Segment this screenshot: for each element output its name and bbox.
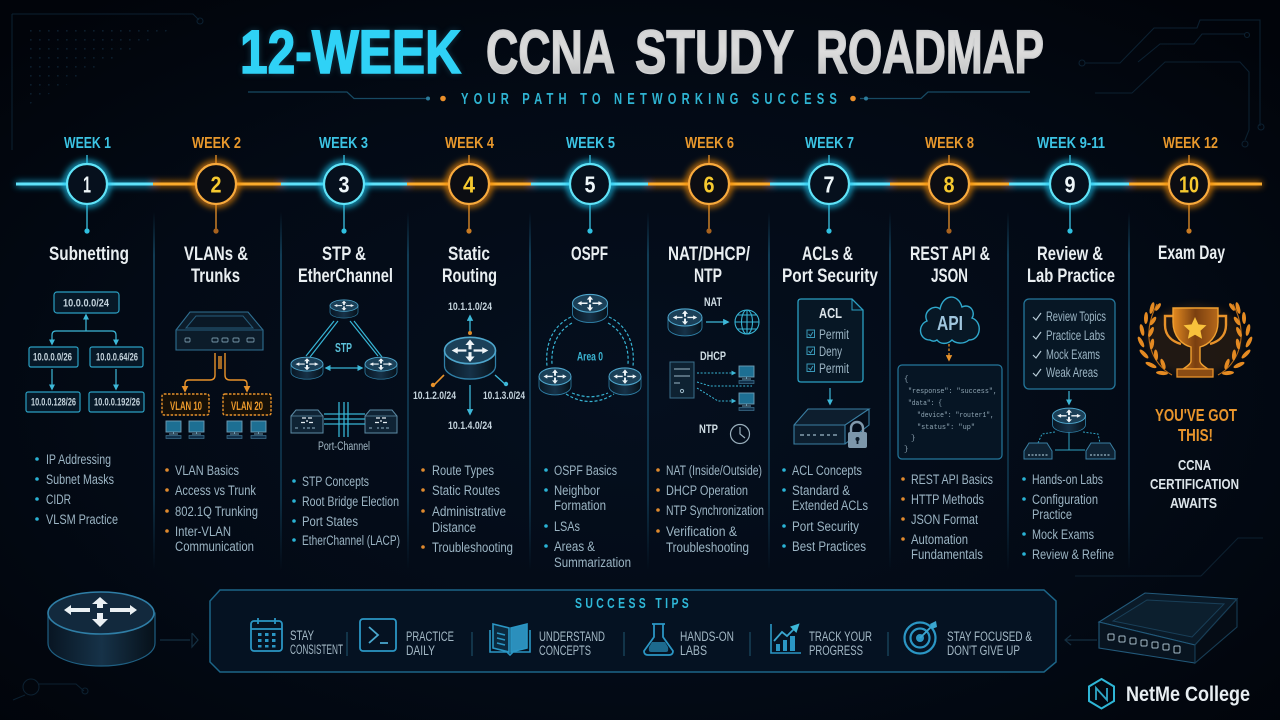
node 3: 3 [338, 172, 350, 198]
topic list: Standard & [792, 483, 850, 498]
DHCP diagram [670, 349, 754, 410]
panel: week 4 [413, 135, 525, 555]
JSON response box: "device": "router1", [917, 412, 994, 420]
week label: WEEK 5 [566, 135, 615, 152]
heading: STP & [322, 243, 366, 265]
topic list: Mock Exams [1032, 527, 1094, 542]
node 5: 5 [584, 172, 596, 198]
OSPF area diagram: Area 0 [577, 350, 603, 364]
panel: week 6 [656, 135, 764, 555]
STP triangle diagram [291, 300, 397, 379]
callout: you've got this [1155, 405, 1237, 445]
topic list: Summarization [554, 555, 631, 570]
heading: NTP [694, 265, 722, 287]
tip: practice daily: PRACTICE [406, 629, 454, 644]
topic list: DHCP Operation [666, 483, 748, 498]
heading: JSON [931, 265, 968, 287]
tip: stay consistent: STAY [290, 628, 314, 643]
tip: track your progress [771, 624, 872, 658]
node 1 [66, 155, 108, 234]
logo: NetMe College: NetMe College [1126, 683, 1250, 706]
subtitle [248, 89, 1030, 107]
NTP label and clock [699, 422, 750, 444]
node 8 [928, 155, 970, 234]
topic list: VLAN Basics [175, 463, 239, 478]
node 7 [808, 155, 850, 234]
DHCP diagram: DHCP [700, 349, 726, 363]
topic list: ACL Concepts [792, 463, 862, 478]
week label: WEEK 8 [925, 135, 974, 152]
week label: WEEK 12 [1163, 135, 1218, 152]
ACL document: Deny [819, 344, 842, 359]
checklist [1024, 299, 1115, 389]
topic list: REST API Basics [911, 472, 993, 487]
heading [668, 243, 750, 287]
topic list: Formation [554, 498, 606, 513]
heading: Lab Practice [1027, 265, 1115, 287]
panel: week 3 [291, 135, 400, 548]
decoration: dot grid [30, 30, 166, 104]
title: STUDY [635, 18, 794, 86]
tip: stay focused: DON'T GIVE UP [947, 643, 1020, 658]
node 8: 8 [944, 172, 955, 198]
subnet tree diagram: 10.0.0.0/26 [33, 352, 72, 364]
VLAN trunk diagram: VLAN 10 [170, 401, 202, 413]
topic list: Root Bridge Election [302, 494, 399, 509]
port-channel diagram: Port-Channel [318, 441, 370, 453]
heading: Exam Day [1158, 242, 1225, 264]
checklist: Practice Labs [1046, 328, 1105, 343]
topic list: Neighbor [554, 483, 600, 498]
topic list [901, 472, 993, 562]
NTP label and clock: NTP [699, 422, 718, 436]
JSON response box: } [911, 435, 916, 443]
topic list: Best Practices [792, 539, 866, 554]
panel: week 2 [162, 135, 271, 554]
topic list [656, 463, 764, 555]
topic list: Practice [1032, 507, 1072, 522]
node 7: 7 [824, 172, 834, 198]
JSON response box: "status": "up" [917, 424, 975, 432]
OSPF area diagram [539, 294, 641, 402]
API cloud [921, 297, 979, 360]
text: CCNA certification awaits [1150, 457, 1239, 512]
arrow: router to tips [160, 633, 198, 647]
heading: VLANs & [184, 243, 248, 265]
heading: SUCCESS TIPS [575, 595, 689, 611]
week label: WEEK 1 [64, 135, 111, 152]
subnet tree diagram: 10.0.0.64/26 [96, 352, 138, 364]
topic list: 802.1Q Trunking [175, 504, 258, 519]
topic list [292, 474, 400, 548]
topic list: Access vs Trunk [175, 483, 256, 498]
icon: large switch [1099, 593, 1237, 663]
tip: stay consistent: CONSISTENT [290, 642, 343, 657]
tip: understand concepts [490, 624, 605, 658]
tip: stay focused: STAY FOCUSED & [947, 629, 1032, 644]
panel: week 8 [898, 135, 1002, 562]
topic list: CIDR [46, 492, 71, 507]
tip: understand concepts: UNDERSTAND [539, 629, 605, 644]
topic list: OSPF Basics [554, 463, 617, 478]
checklist: Weak Areas [1046, 365, 1098, 380]
node 10 [1168, 155, 1210, 234]
topic list: Route Types [432, 463, 494, 478]
tip: track your progress: TRACK YOUR [809, 629, 872, 644]
JSON response box: "response": "success", [908, 388, 997, 396]
topic list: STP Concepts [302, 474, 369, 489]
node 1: 1 [83, 172, 91, 198]
heading: NAT/DHCP/ [668, 243, 750, 265]
heading [910, 243, 990, 287]
text: CCNA certification awaits: CERTIFICATION [1150, 476, 1239, 493]
column dividers [154, 212, 1129, 570]
node 9: 9 [1064, 172, 1076, 198]
heading: Review & [1037, 243, 1103, 265]
heading: OSPF [571, 243, 608, 265]
ACL document: Permit [819, 327, 849, 342]
heading: Static [448, 243, 490, 265]
topic list [421, 463, 513, 555]
subtitle: YOUR PATH TO NETWORKING SUCCESS [461, 89, 837, 107]
topic list: JSON Format [911, 512, 978, 527]
static routing diagram: 10.1.4.0/24 [448, 420, 492, 432]
JSON response box: "data": { [908, 400, 942, 408]
VLAN trunk diagram: VLAN 20 [231, 401, 263, 413]
tip: understand concepts: CONCEPTS [539, 643, 591, 658]
topic list: Communication [175, 539, 254, 554]
JSON response box: } [904, 446, 909, 454]
subnet tree diagram [26, 292, 144, 412]
NAT diagram [668, 295, 759, 336]
port-channel diagram [291, 402, 397, 453]
week label: WEEK 7 [805, 135, 854, 152]
tip: stay focused [904, 621, 1032, 658]
topic list: Configuration [1032, 492, 1098, 507]
topic list: Verification & [666, 524, 737, 539]
topic list: Port Security [792, 519, 859, 534]
node 6: 6 [704, 172, 714, 198]
node 2 [196, 155, 236, 234]
node 4: 4 [463, 172, 475, 198]
NAT diagram: NAT [704, 295, 722, 309]
subnet tree diagram: 10.0.0.128/26 [31, 396, 76, 408]
tip: hands-on labs: HANDS-ON [680, 629, 734, 644]
panel: success tips [210, 590, 1056, 672]
heading: Routing [442, 265, 497, 287]
topic list: Extended ACLs [792, 498, 868, 513]
JSON response box: { [904, 376, 909, 384]
static routing diagram: 10.1.3.0/24 [483, 390, 525, 402]
icon: trophy with laurels [1136, 302, 1254, 377]
ACL document: Permit [819, 361, 849, 376]
tip: practice daily: DAILY [406, 643, 435, 658]
panel: week 1 [26, 135, 144, 527]
week label: WEEK 2 [192, 135, 241, 152]
text: CCNA certification awaits: AWAITS [1170, 495, 1217, 512]
callout: you've got this: THIS! [1178, 425, 1213, 445]
topic list: Inter-VLAN [175, 524, 231, 539]
node 2: 2 [210, 172, 222, 198]
API cloud: API [937, 313, 963, 335]
node 4 [448, 155, 490, 234]
title: 12-WEEK [240, 18, 461, 86]
tip separators [347, 632, 888, 656]
text: CCNA certification awaits: CCNA [1178, 457, 1211, 474]
topic list [35, 452, 118, 527]
heading [442, 243, 497, 287]
topic list: Subnet Masks [46, 472, 114, 487]
topic list: VLSM Practice [46, 512, 118, 527]
heading: Subnetting [49, 243, 129, 265]
node 10: 10 [1179, 172, 1199, 198]
topic list: NTP Synchronization [666, 503, 764, 518]
topic list: Distance [432, 520, 476, 535]
static routing diagram: 10.1.2.0/24 [413, 390, 456, 402]
week label: WEEK 9-11 [1037, 135, 1105, 152]
heading: REST API & [910, 243, 990, 265]
topic list: Troubleshooting [432, 540, 513, 555]
topic list: Port States [302, 514, 358, 529]
tip: stay consistent [251, 618, 343, 657]
heading [1027, 243, 1115, 287]
checklist: Review Topics [1046, 309, 1106, 324]
static routing diagram [413, 301, 525, 432]
node 6 [688, 155, 730, 234]
title: ROADMAP [816, 18, 1044, 86]
node 5 [570, 155, 610, 234]
tip: hands-on labs: LABS [680, 643, 707, 658]
heading [782, 243, 878, 287]
ACL document [798, 299, 863, 382]
node 3 [324, 155, 364, 234]
subnet tree diagram: 10.0.0.0/24 [63, 298, 109, 310]
tip: practice daily [360, 619, 454, 658]
topic list: Troubleshooting [666, 540, 749, 555]
icon: large router [48, 592, 155, 666]
logo: NetMe College [1089, 679, 1250, 708]
topic list: NAT (Inside/Outside) [666, 463, 762, 478]
heading [298, 243, 393, 287]
topic list [782, 463, 868, 554]
STP triangle diagram: STP [335, 341, 352, 355]
week label: WEEK 4 [445, 135, 494, 152]
VLAN trunk diagram [162, 312, 271, 438]
topic list: Administrative [432, 504, 506, 519]
topic list: Hands-on Labs [1032, 472, 1103, 487]
callout: you've got this: YOU'VE GOT [1155, 405, 1237, 425]
topic list [544, 463, 631, 570]
topic list: EtherChannel (LACP) [302, 533, 400, 548]
topic list: Review & Refine [1032, 547, 1114, 562]
tip: hands-on labs [644, 624, 734, 658]
topic list: IP Addressing [46, 452, 111, 467]
timeline line [16, 182, 1262, 186]
topic list [1022, 472, 1114, 562]
topic list: HTTP Methods [911, 492, 984, 507]
topic list: Fundamentals [911, 547, 983, 562]
heading: Port Security [782, 265, 878, 287]
title: CCNA [486, 18, 615, 86]
JSON response box [898, 365, 1002, 459]
panel: week 12 [1136, 135, 1254, 512]
lab topology [1024, 391, 1115, 459]
subnet tree diagram: 10.0.0.192/26 [94, 396, 140, 408]
title [240, 18, 1044, 86]
static routing diagram: 10.1.1.0/24 [448, 301, 492, 313]
panel: weeks 9-11 [1022, 135, 1115, 562]
heading: ACLs & [802, 243, 853, 265]
topic list [165, 463, 258, 554]
panel: week 5 [539, 135, 641, 570]
switch with lock [794, 388, 869, 448]
heading: Trunks [191, 265, 240, 287]
panel: week 7 [782, 135, 878, 554]
topic list: LSAs [554, 519, 580, 534]
week label: WEEK 3 [319, 135, 368, 152]
topic list: Static Routes [432, 483, 500, 498]
node 9 [1050, 155, 1090, 234]
topic list: Automation [911, 532, 968, 547]
arrow: switch to tips [1065, 635, 1097, 645]
checklist: Mock Exams [1046, 347, 1100, 362]
heading [184, 243, 248, 287]
tip: track your progress: PROGRESS [809, 643, 863, 658]
topic list: Areas & [554, 539, 595, 554]
title: 12-WEEK [240, 18, 461, 86]
heading: EtherChannel [298, 265, 393, 287]
ACL document: ACL [819, 306, 842, 322]
week label: WEEK 6 [685, 135, 734, 152]
